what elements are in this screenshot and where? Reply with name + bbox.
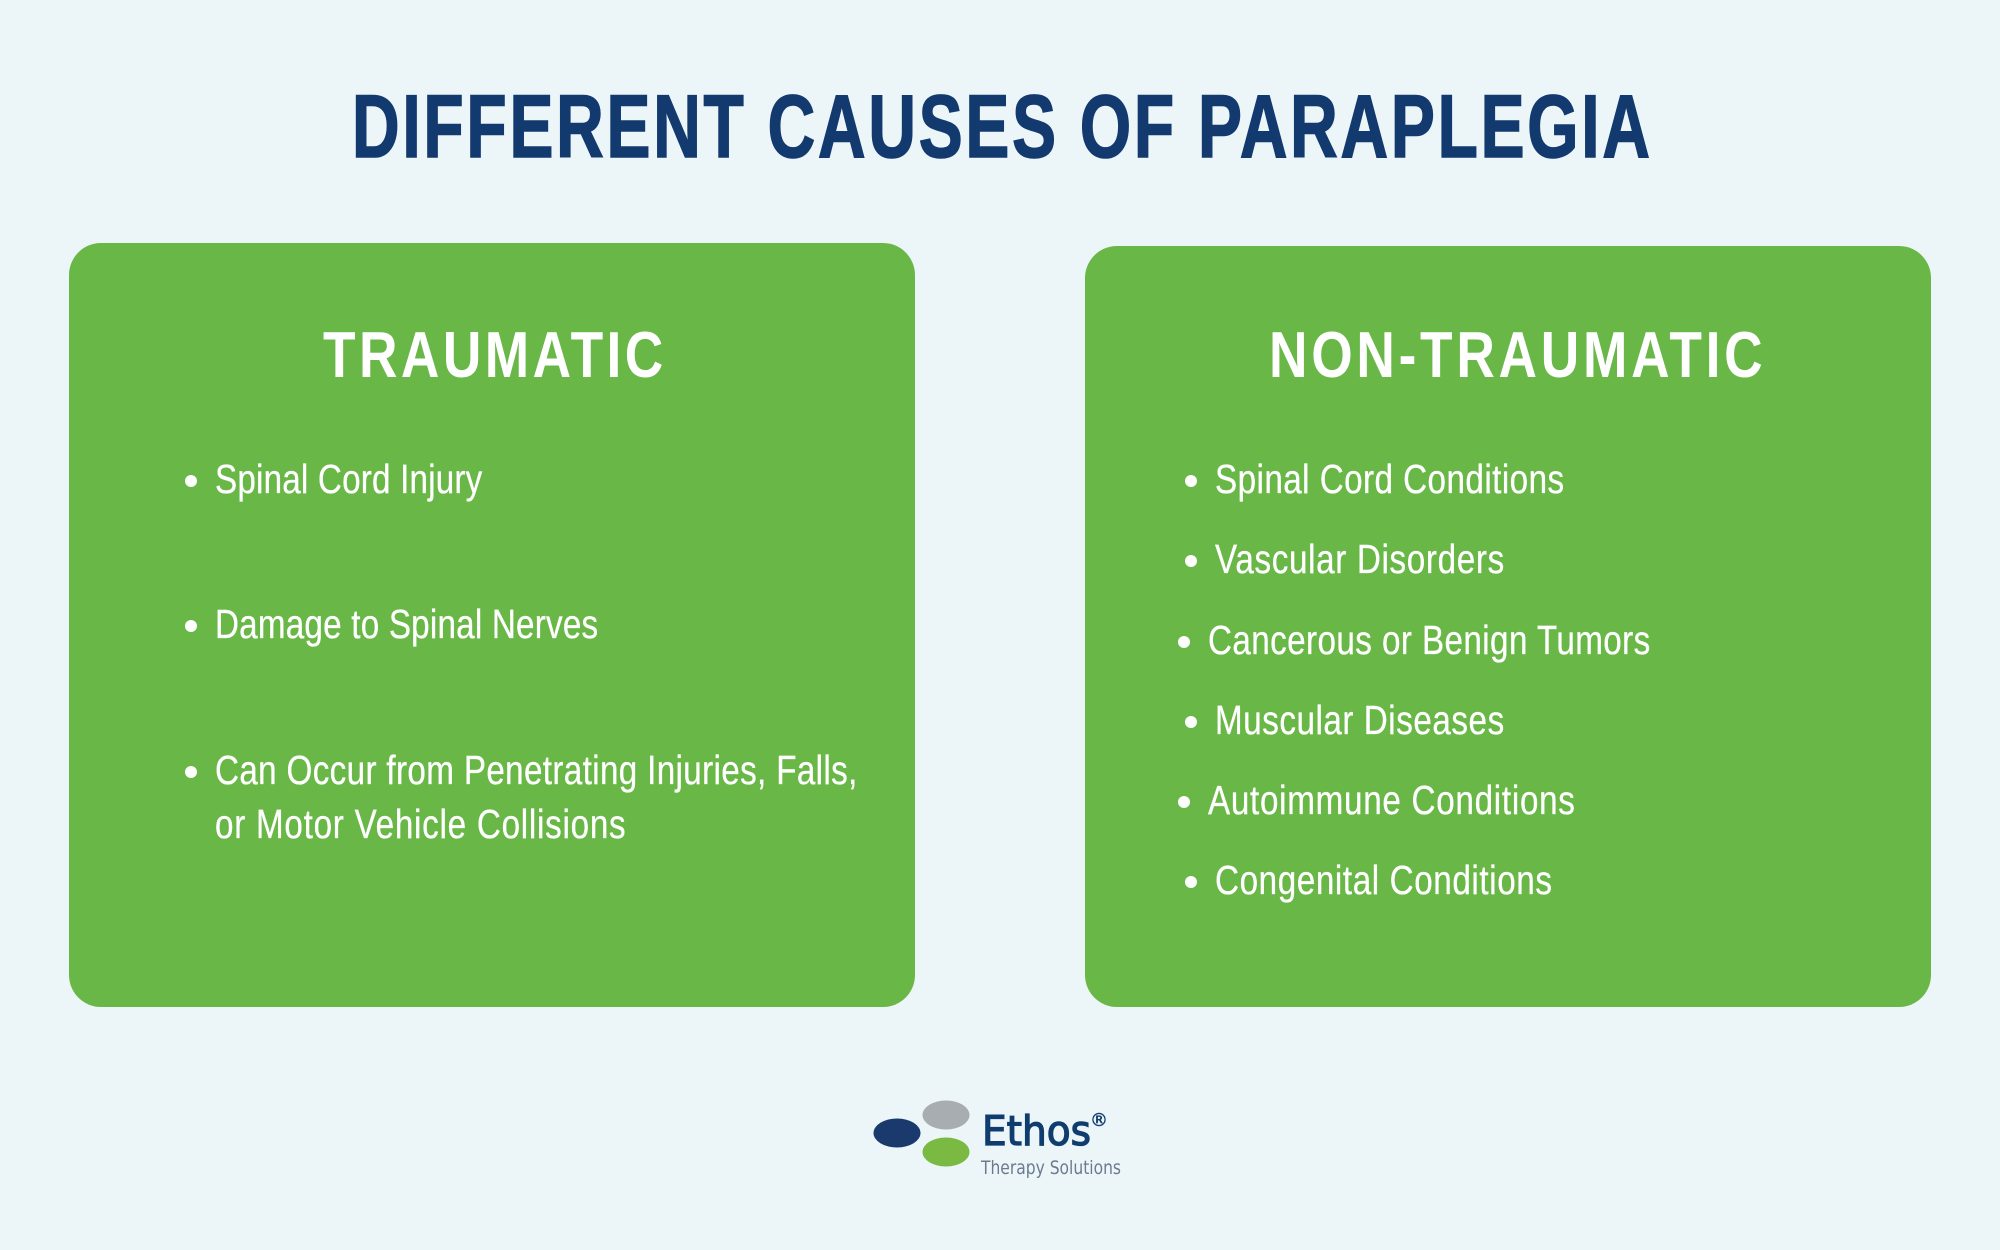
logo: Ethos Therapy Solutions xyxy=(874,1100,1121,1179)
icon: three ovals xyxy=(874,1100,970,1166)
logo wordmark: Ethos xyxy=(982,1107,1091,1155)
list: traumatic causes: Spinal Cord Injury xyxy=(215,456,483,502)
list: traumatic causes: Damage to Spinal Nerves xyxy=(215,601,598,647)
list: non-traumatic causes xyxy=(1178,456,1650,903)
registered mark: ® xyxy=(1090,1110,1108,1131)
title: DIFFERENT CAUSES OF PARAPLEGIA xyxy=(352,76,1650,176)
heading: non-traumatic: NON-TRAUMATIC xyxy=(1269,318,1763,391)
list: non-traumatic causes: Cancerous or Benign Tumors xyxy=(1208,617,1650,663)
panel: traumatic xyxy=(69,243,915,1007)
list: non-traumatic causes: Muscular Diseases xyxy=(1215,697,1504,743)
panel: non-traumatic xyxy=(1085,246,1931,1007)
list: traumatic causes: or Motor Vehicle Collisions xyxy=(215,801,626,847)
list: non-traumatic causes: Congenital Conditions xyxy=(1215,857,1552,903)
list: non-traumatic causes: Autoimmune Conditions xyxy=(1208,777,1575,823)
list: non-traumatic causes: Vascular Disorders xyxy=(1215,536,1504,582)
logo tagline: Therapy Solutions xyxy=(980,1157,1121,1179)
list: traumatic causes xyxy=(185,456,857,847)
list: non-traumatic causes: Spinal Cord Conditions xyxy=(1215,456,1564,502)
list: traumatic causes: Can Occur from Penetrating Injuries, Falls, xyxy=(215,747,857,793)
heading: traumatic: TRAUMATIC xyxy=(323,318,663,391)
